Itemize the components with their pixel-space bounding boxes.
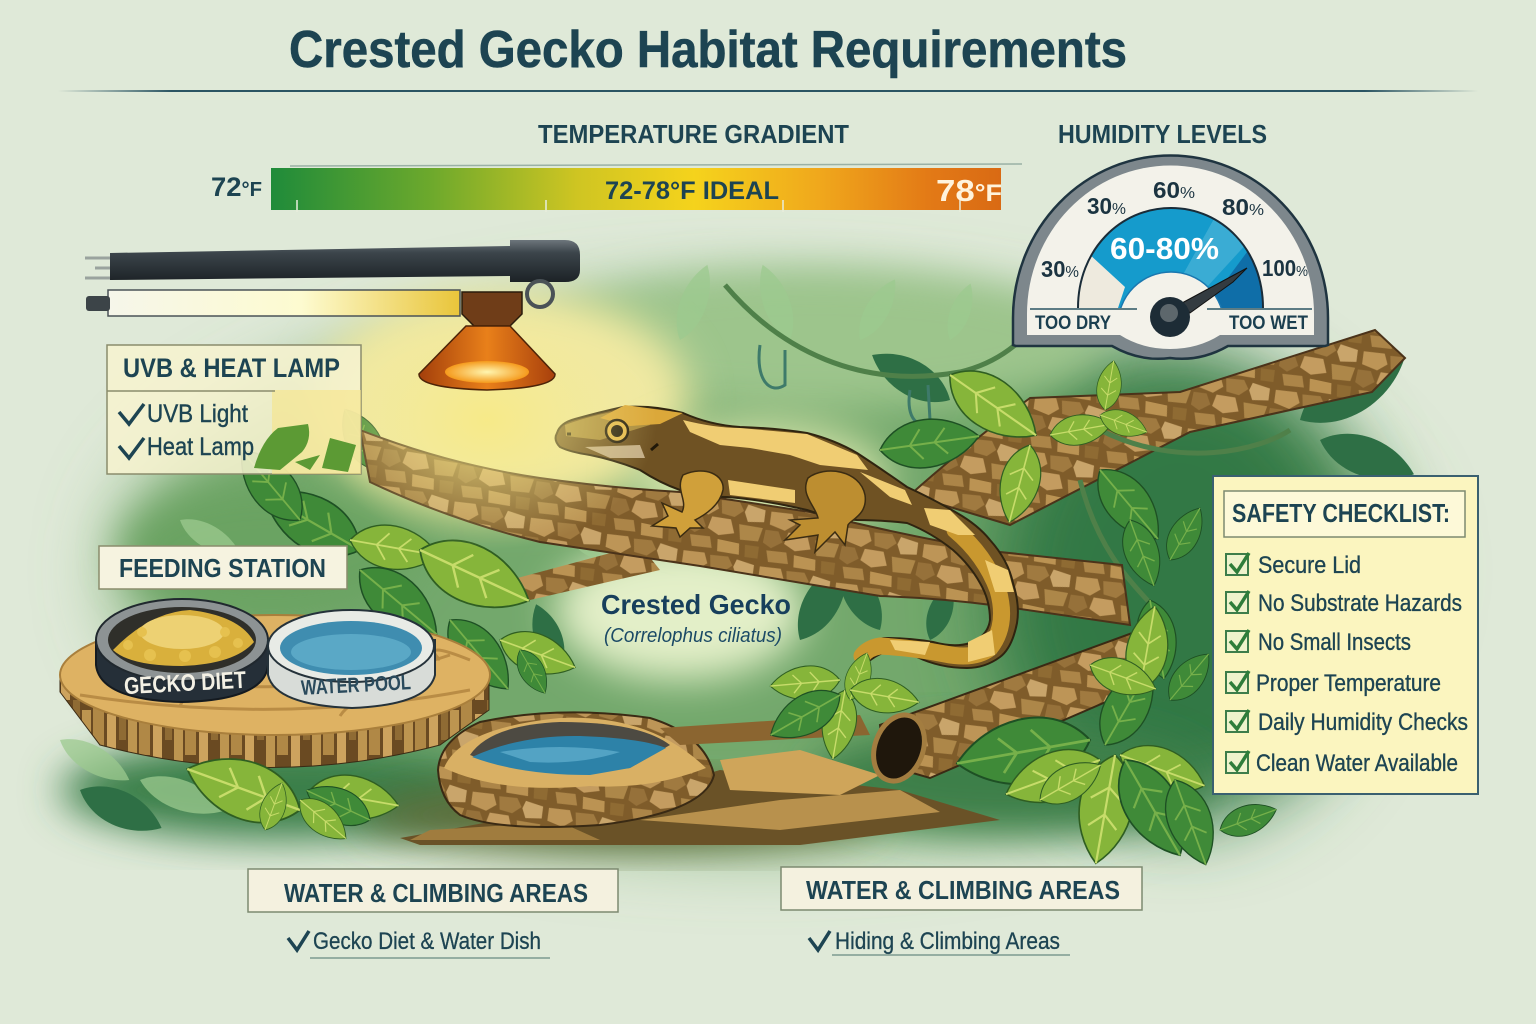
uvb tube	[108, 290, 460, 316]
callout heading: WATER & CLIMBING AREAS	[806, 875, 1120, 905]
dark blue zone	[1216, 252, 1262, 308]
uvb check item: UVB Light	[147, 400, 248, 428]
humidity gauge: 60%	[1153, 177, 1195, 203]
crest and pale pattern	[600, 405, 1014, 662]
panel box	[107, 345, 361, 474]
range value: 60-80%	[1110, 231, 1219, 266]
humidity heading: HUMIDITY LEVELS	[1058, 119, 1267, 149]
body and tail	[556, 407, 1018, 668]
callout box	[781, 867, 1142, 910]
temperature gradient	[211, 119, 1022, 212]
item: proper temperature: Proper Temperature	[1256, 670, 1441, 697]
panel glow	[272, 390, 361, 474]
foliage behind gecko	[226, 354, 1212, 703]
wood stump	[60, 615, 490, 768]
head tint	[565, 408, 650, 440]
gauge housing	[1013, 155, 1328, 359]
gecko diet pellets	[113, 610, 254, 666]
blue zone	[1092, 209, 1247, 308]
species label	[601, 589, 791, 647]
gecko diet label: GECKO DIET	[123, 667, 247, 700]
lamp shade	[419, 326, 555, 390]
scale divider	[1030, 308, 1312, 310]
nostril and ear	[567, 434, 658, 450]
callout item: Gecko Diet & Water Dish	[313, 928, 541, 955]
callout check	[288, 931, 309, 950]
panel heading: UVB & HEAT LAMP	[123, 353, 340, 383]
item: no substrate hazards: No Substrate Hazards	[1258, 590, 1462, 617]
water and climbing callout left	[248, 869, 618, 958]
item: clean water available: Clean Water Available	[1256, 750, 1458, 777]
feeding heading: FEEDING STATION	[119, 553, 326, 583]
divider	[107, 390, 275, 392]
tail golden colour	[862, 530, 1002, 656]
bar ticks	[297, 200, 960, 212]
dial outline	[1078, 208, 1263, 308]
callout box	[248, 869, 618, 912]
hollow log	[865, 632, 1150, 788]
motion streaks	[85, 258, 150, 278]
checklist heading: SAFETY CHECKLIST:	[1232, 498, 1450, 528]
panel leaves	[254, 424, 356, 472]
scientific name: (Correlophus ciliatus)	[604, 625, 782, 647]
callout underline	[832, 954, 1070, 956]
item: daily humidity checks: Daily Humidity Checks	[1258, 709, 1468, 736]
tube end cap	[86, 296, 110, 311]
small stick	[660, 715, 870, 745]
water pool label: WATER POOL	[300, 671, 412, 700]
heat lamp check item: Heat Lamp	[147, 433, 254, 461]
humidity gauge	[1013, 155, 1328, 378]
beige zone	[1079, 256, 1125, 308]
needle hub	[1150, 297, 1190, 337]
eye	[606, 420, 628, 442]
lower branch behind	[510, 545, 660, 600]
fixture bar	[110, 240, 580, 282]
upper right branch	[910, 330, 1405, 525]
temperature bar	[271, 168, 1001, 210]
high label: 78°F	[936, 173, 1002, 208]
title rule	[58, 90, 1478, 92]
front leg	[652, 471, 723, 537]
lamp neck	[462, 292, 522, 326]
temperature heading: TEMPERATURE GRADIENT	[538, 119, 849, 149]
safety checklist	[1213, 476, 1478, 794]
callout item: Hiding & Climbing Areas	[835, 928, 1060, 955]
title: Crested Gecko Habitat Requirements	[289, 21, 1127, 79]
hub cutout	[1120, 271, 1222, 308]
callout heading: WATER & CLIMBING AREAS	[284, 878, 588, 908]
water bowl	[268, 610, 435, 708]
light blue streak	[1184, 220, 1244, 286]
jungle foliage backdrop	[53, 260, 1421, 850]
scale labels: 30%	[1041, 256, 1079, 282]
lamp hook	[527, 281, 553, 307]
too dry label: TOO DRY	[1035, 313, 1111, 334]
feeding heading box	[99, 546, 347, 589]
humidity gauge: 100%	[1262, 255, 1308, 281]
item: secure lid: Secure Lid	[1258, 552, 1361, 579]
foreground foliage	[73, 603, 1281, 872]
gauge face	[1027, 165, 1314, 349]
rear leg	[785, 471, 865, 552]
item: no small insects: No Small Insects	[1258, 629, 1411, 656]
ground path stones	[400, 750, 1000, 845]
uvb and heat lamp panel	[107, 345, 361, 474]
callout underline	[310, 957, 550, 959]
uvb and heat lamp fixture	[85, 240, 657, 550]
needle	[1182, 268, 1247, 313]
dial dome	[1079, 209, 1262, 308]
rock water dish	[438, 712, 714, 827]
dark food bowl	[96, 599, 268, 702]
bar top line	[290, 164, 1022, 166]
checklist panel	[1213, 476, 1478, 794]
main branch	[360, 430, 1130, 625]
checklist heading box	[1224, 491, 1465, 537]
callout check	[809, 931, 830, 950]
ideal label: 72-78°F IDEAL	[605, 177, 779, 205]
water and climbing callout right	[781, 867, 1142, 955]
low label: 72°F	[211, 172, 262, 202]
light glow	[317, 290, 657, 550]
too wet label: TOO WET	[1229, 313, 1308, 334]
humidity gauge: 30%	[1087, 193, 1126, 219]
mouth pale scales	[585, 445, 645, 458]
humidity gauge: 80%	[1222, 194, 1264, 220]
vines	[725, 285, 1290, 625]
bulb	[445, 361, 529, 383]
crested gecko	[556, 405, 1018, 668]
feeding station	[60, 546, 490, 768]
common name: Crested Gecko	[601, 589, 791, 620]
